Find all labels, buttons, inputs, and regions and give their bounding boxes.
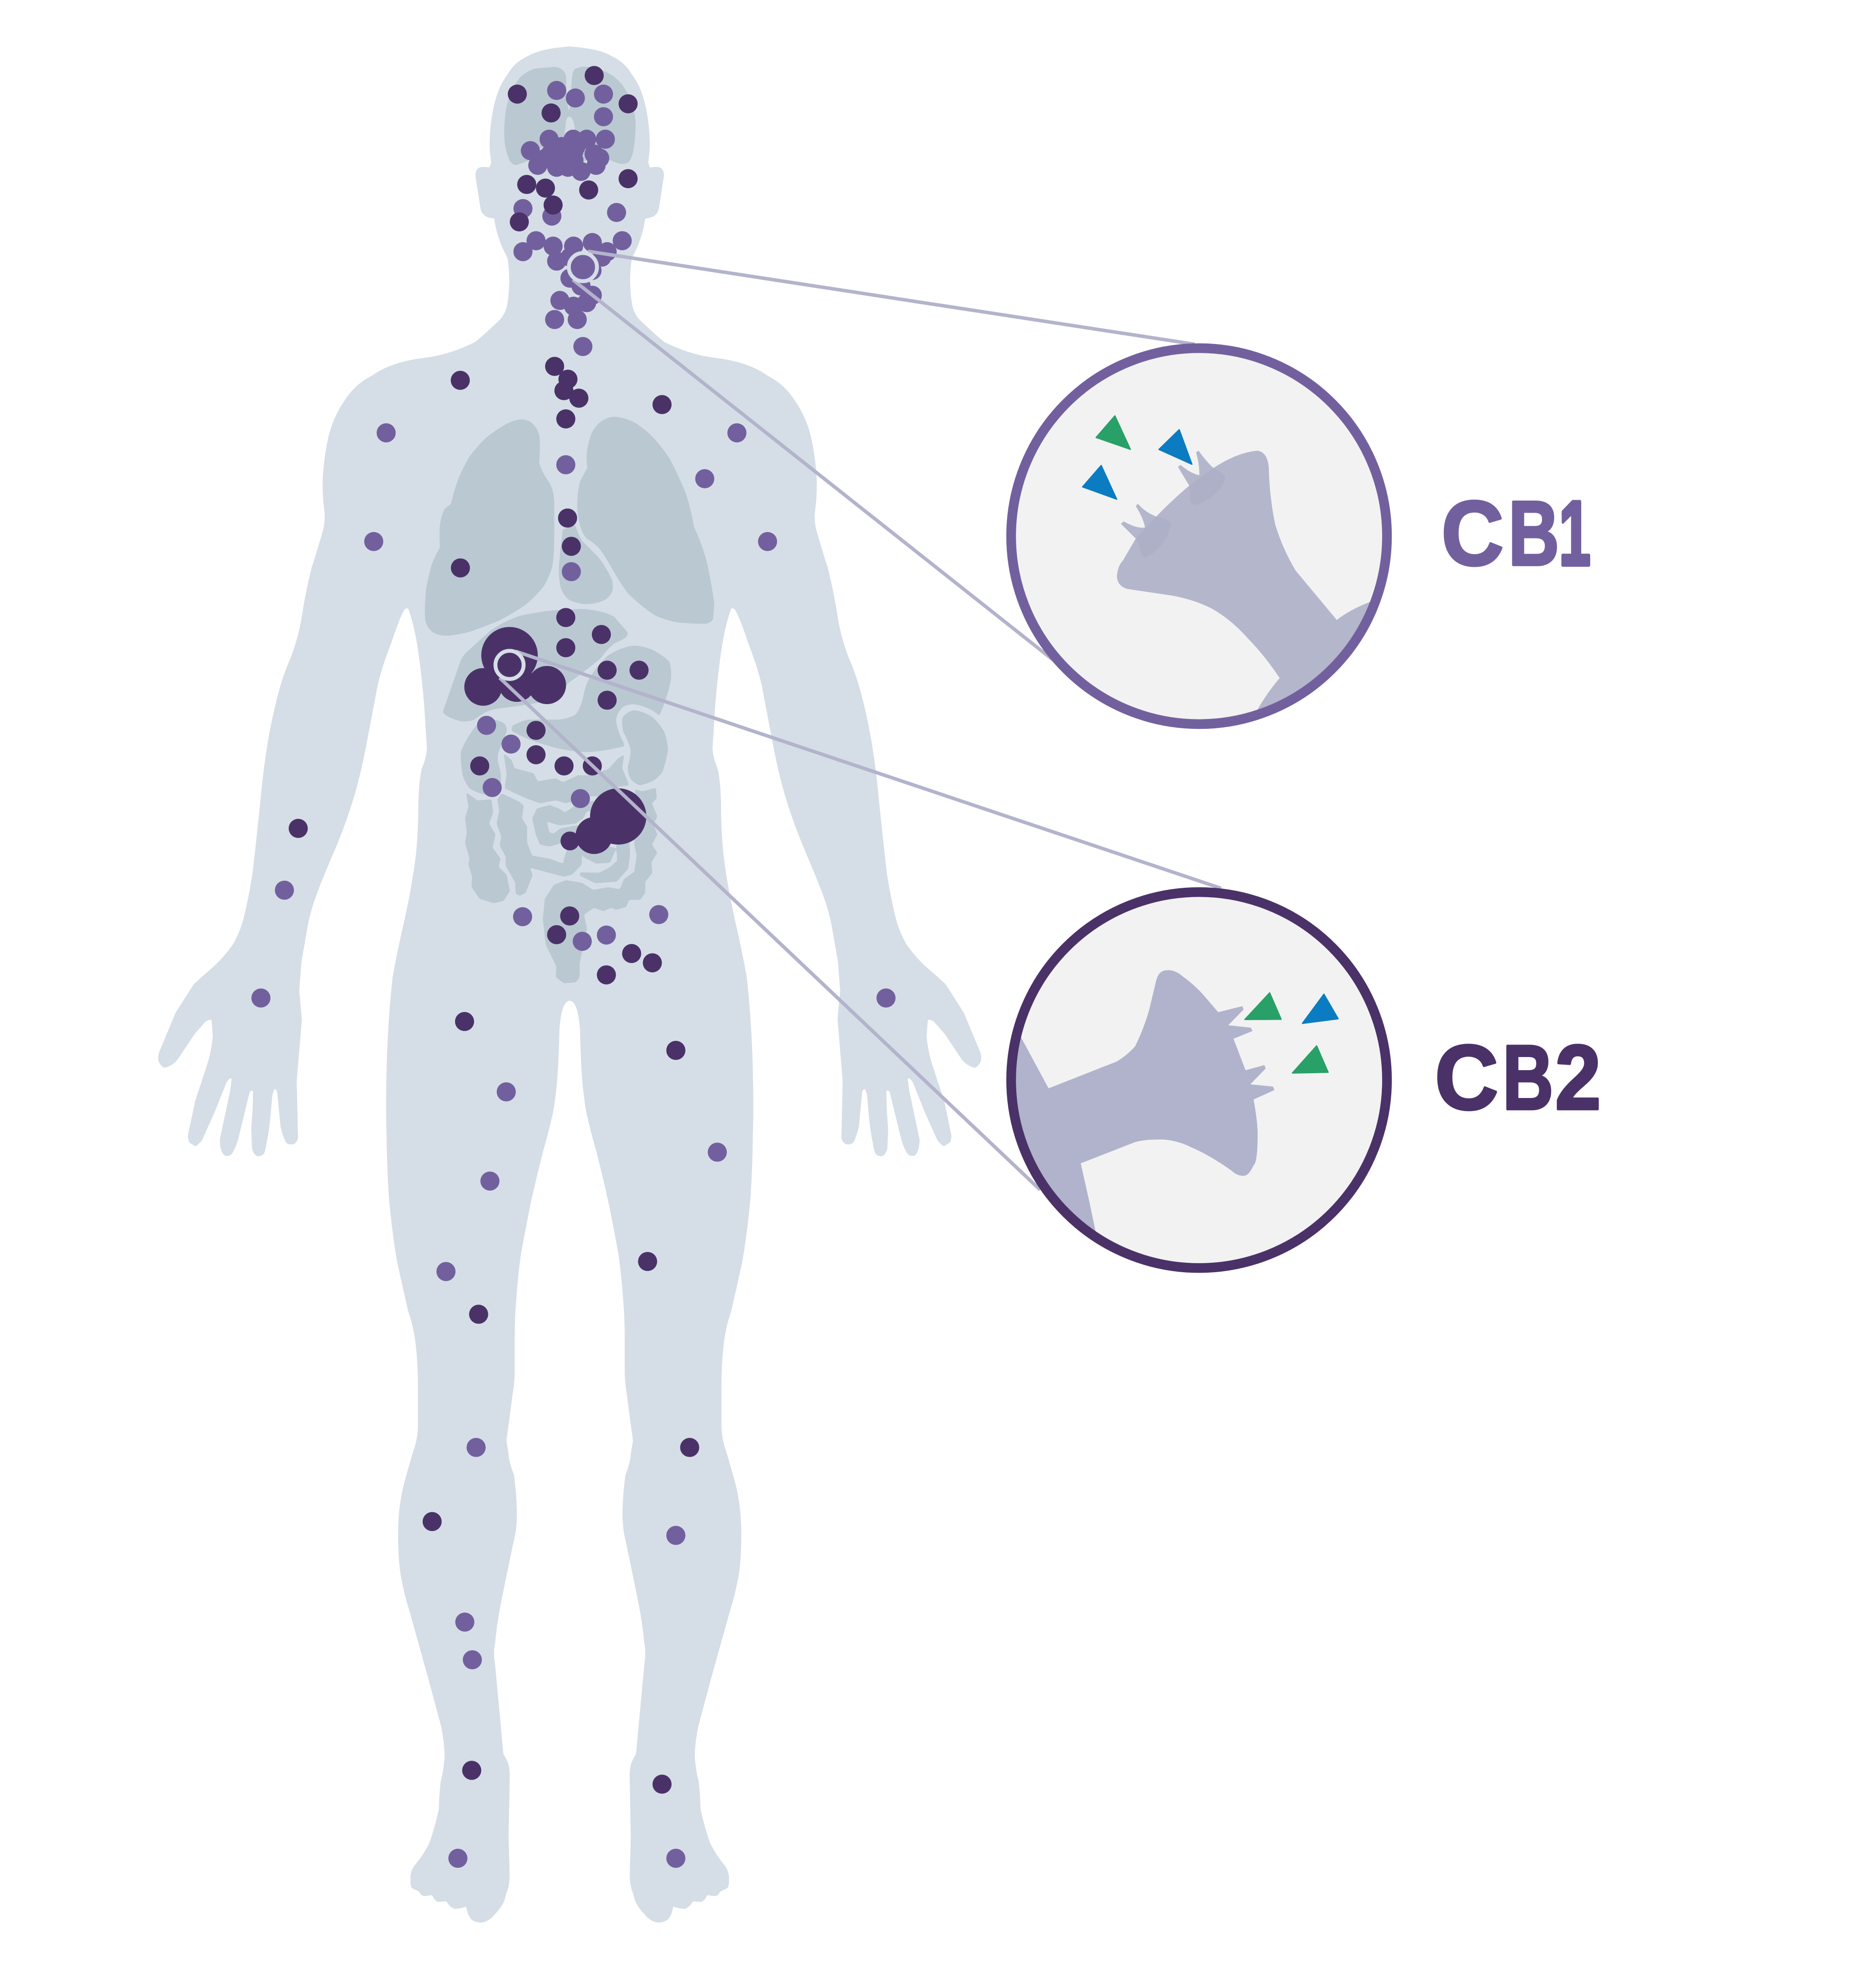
- label: CB1: 1: [1559, 483, 1591, 585]
- organ: brain base: [540, 136, 603, 161]
- magnifier panel: CB1: [1011, 348, 1392, 746]
- organ: small intestine right: [580, 840, 630, 883]
- organ: heart: [559, 525, 613, 604]
- molecule: green triangle: [1245, 993, 1281, 1020]
- neuron terminal CB2: [1016, 970, 1275, 1231]
- organ: small intestine loop: [532, 800, 596, 847]
- organ: stomach: [512, 646, 671, 752]
- body silhouette: [158, 46, 981, 1923]
- organ: right lung: [577, 416, 714, 624]
- label: CB1: B: [1508, 483, 1559, 585]
- highlight ring: CB2 site: [496, 651, 523, 679]
- molecule: blue triangle: [1159, 430, 1192, 464]
- connector lines to CB2 magnifier: [500, 651, 1221, 1190]
- connector lines to CB1 magnifier: [573, 251, 1195, 660]
- label: CB2: 2: [1555, 1027, 1601, 1129]
- magnifier panel: CB2: [980, 892, 1387, 1269]
- organ: brain left: [504, 67, 569, 165]
- highlight ring: CB1 site: [569, 253, 597, 281]
- molecule: green triangle: [1096, 416, 1130, 449]
- organ: left lung: [425, 419, 554, 636]
- molecule: green triangle: [1292, 1046, 1328, 1073]
- organ: brain right: [569, 67, 636, 164]
- CB2 receptor dots (dark purple): [289, 66, 699, 1794]
- organ: descending colon and rectum: [543, 788, 658, 983]
- internal organs: [425, 67, 714, 983]
- organ: spleen: [622, 710, 668, 785]
- organ: ascending colon: [465, 792, 510, 903]
- organ: small intestine strip: [496, 793, 582, 896]
- organ: liver: [443, 609, 628, 722]
- organ: transverse bowel: [504, 753, 629, 804]
- large CB2 clusters: liver: [464, 627, 566, 706]
- label: CB2: B: [1502, 1027, 1553, 1129]
- molecule: blue triangle: [1082, 465, 1117, 499]
- CB1 receptor dots (light purple): [251, 81, 896, 1868]
- organ: upper ascending bowel: [461, 719, 507, 795]
- large CB2 clusters: intestine: [560, 788, 646, 854]
- organ: small intestine centre: [582, 843, 616, 864]
- molecule: blue triangle: [1303, 994, 1338, 1023]
- label: CB1: C: [1441, 483, 1504, 585]
- neuron terminal CB1: [1117, 451, 1370, 709]
- label: CB2: C: [1435, 1027, 1498, 1129]
